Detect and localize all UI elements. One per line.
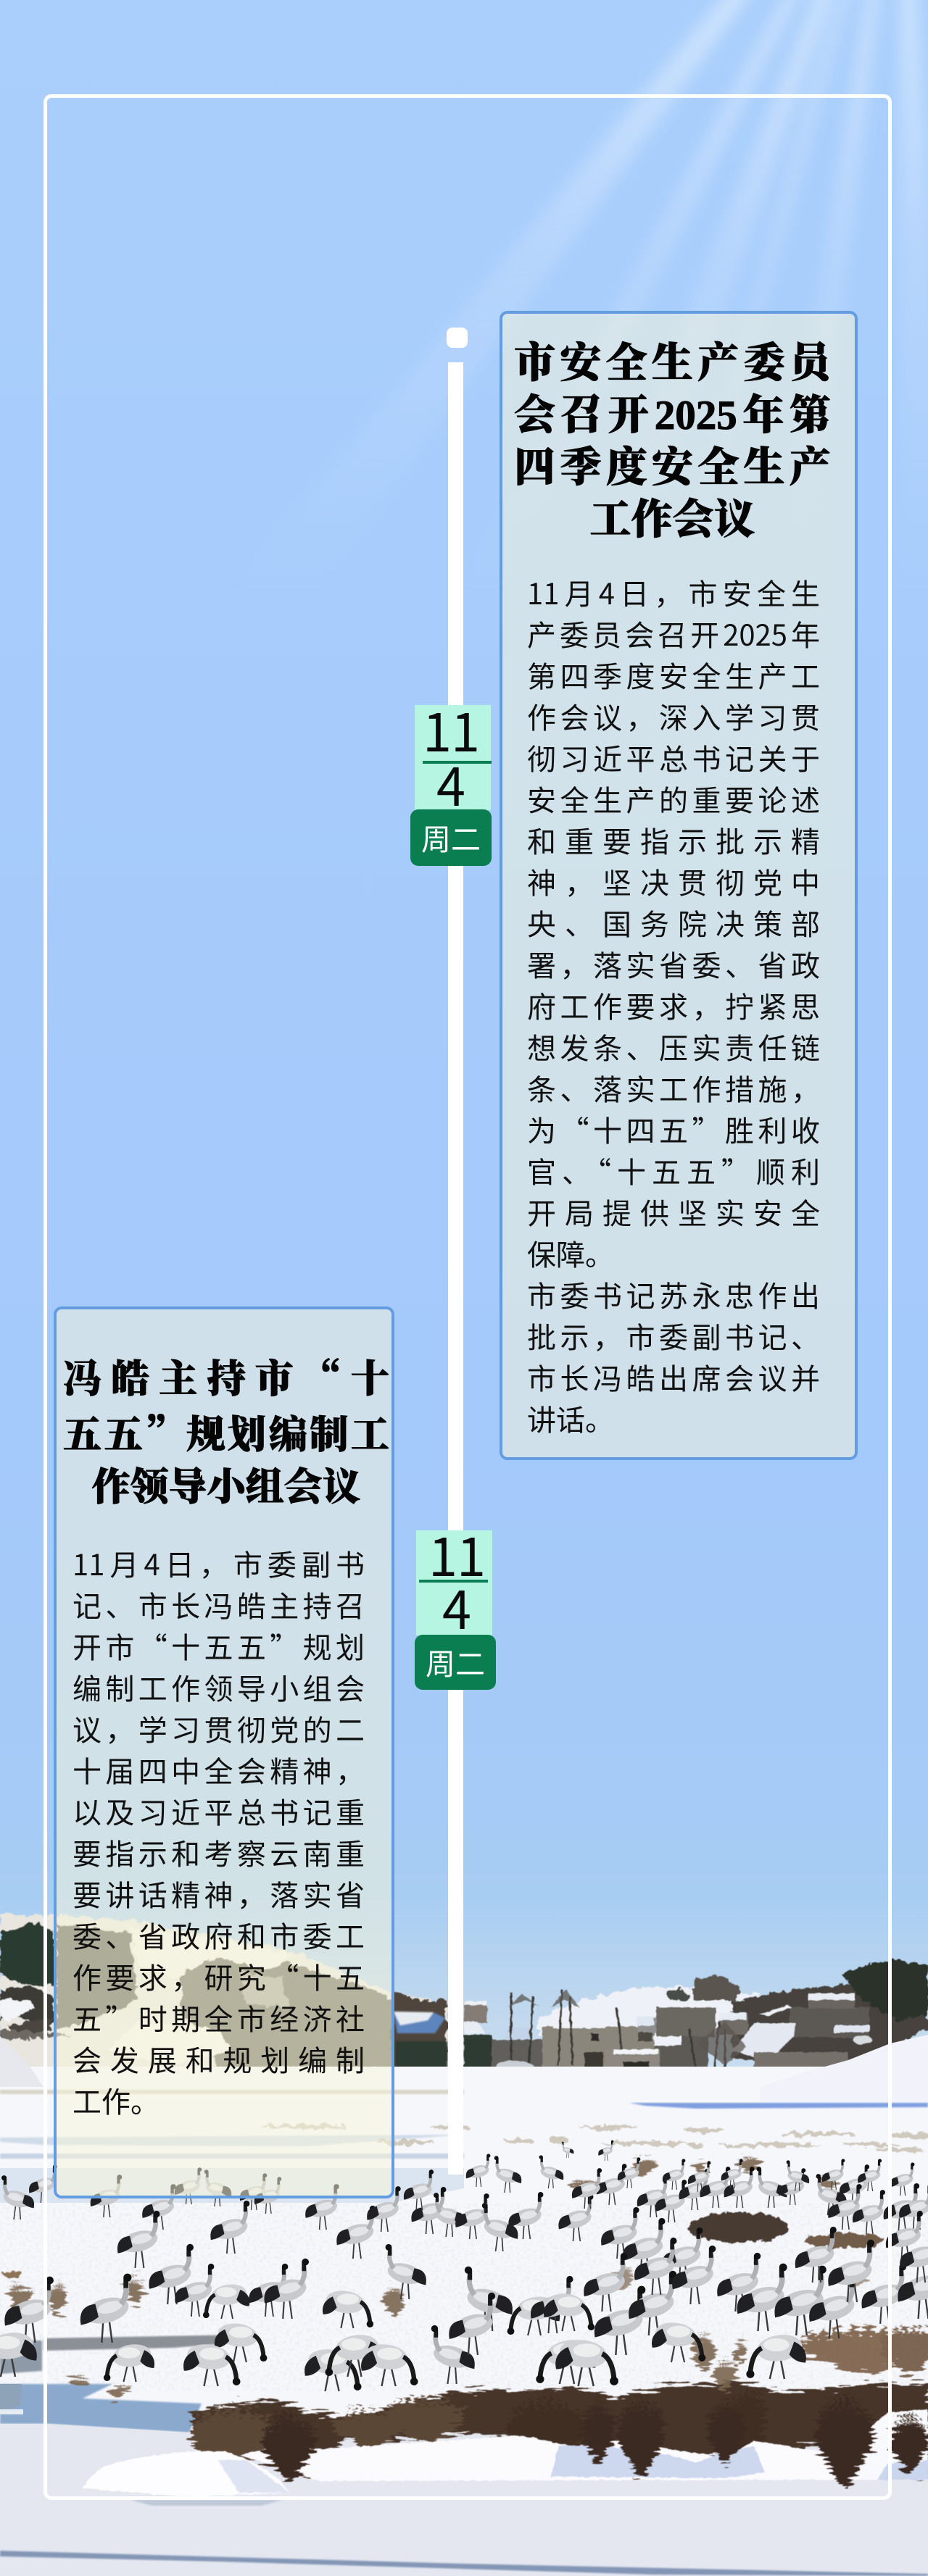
text block: 15th five-year plan meeting: 会发展和规划编制 [72, 2038, 365, 2080]
text block: 15th five-year plan meeting: 工作。 [72, 2079, 160, 2121]
text block: safety production meeting: 讲话。 [527, 1397, 614, 1439]
black-necked cranes [0, 2141, 928, 2391]
panel: 15th five-year plan meeting [54, 1306, 394, 2198]
weekday tag [410, 809, 492, 866]
text block: 15th five-year plan meeting: 五”时期全市经济社 [72, 1996, 365, 2038]
weekday tag [415, 1635, 496, 1690]
text block: safety production meeting: 条、落实工作措施， [527, 1067, 820, 1109]
text block: safety production meeting: 神，坚决贯彻党中 [527, 860, 820, 902]
text block: 15th five-year plan meeting: 开市“十五五”规划 [72, 1625, 365, 1667]
heading: 15th five-year plan meeting [63, 1349, 389, 1509]
text block: safety production meeting: 为“十四五”胜利收 [527, 1108, 820, 1150]
text block: 15th five-year plan meeting: 委、省政府和市委工 [72, 1914, 365, 1956]
text block: 15th five-year plan meeting [72, 1542, 365, 2121]
text block: safety production meeting: 想发条、压实责任链 [527, 1025, 820, 1067]
heading: safety production meeting: 四季度安全生产 [514, 445, 831, 491]
text block: 15th five-year plan meeting: 作要求，研究“十五 [72, 1955, 365, 1997]
panel: safety production meeting [500, 311, 858, 1460]
text block: 15th five-year plan meeting: 记、市长冯皓主持召 [72, 1583, 365, 1625]
date badge: second item [415, 1515, 496, 1690]
timeline: top dot [447, 328, 468, 348]
text block: safety production meeting: 11月4日，市安全生 [527, 571, 820, 613]
weekday tag: 周二 [421, 815, 481, 859]
heading: safety production meeting: 市安全生产委员 [514, 341, 831, 386]
brown dry grass band [190, 2380, 928, 2478]
text block: 15th five-year plan meeting: 以及习近平总书记重 [72, 1790, 365, 1832]
date badge: first item [410, 691, 492, 866]
text block: safety production meeting: 市长冯皓出席会议并 [527, 1356, 820, 1398]
weekday tag: 周二 [426, 1640, 485, 1683]
sun rays [115, 0, 928, 725]
text block: safety production meeting: 和重要指示批示精 [527, 819, 820, 861]
date day: 4 [436, 745, 465, 821]
roof and trees at right of left panel [394, 2012, 447, 2069]
text block: safety production meeting: 批示，市委副书记、 [527, 1314, 820, 1356]
heading: 15th five-year plan meeting: 冯皓主持市“十 [63, 1349, 389, 1404]
text block: safety production meeting: 市委书记苏永忠作出 [527, 1273, 820, 1315]
timeline: vertical line [448, 362, 463, 2175]
date day: 4 [442, 1568, 471, 1644]
distant hill and tree line [538, 1961, 928, 2065]
date month: 11 [423, 691, 479, 767]
small tufts and grass patches [9, 2155, 928, 2397]
text block: 15th five-year plan meeting: 十届四中全会精神， [72, 1748, 365, 1791]
text block: safety production meeting: 开局提供坚实安全 [527, 1191, 820, 1233]
grass bushes in front of the snow [262, 2388, 928, 2485]
text block: 15th five-year plan meeting: 11月4日，市委副书 [72, 1542, 365, 1584]
left snowy hill and pine trees [0, 1915, 450, 2072]
text block: safety production meeting: 安全生产的重要论述 [527, 778, 820, 820]
text block: safety production meeting: 彻习近平总书记关于 [527, 736, 820, 778]
text block: safety production meeting: 产委员会召开2025年 [527, 612, 820, 654]
heading: safety production meeting [514, 341, 831, 543]
text block: safety production meeting: 府工作要求，拧紧思 [527, 984, 820, 1026]
date month: 11 [428, 1515, 485, 1591]
text block: 15th five-year plan meeting: 要讲话精神，落实省 [72, 1872, 365, 1914]
village houses [464, 1989, 873, 2072]
text block: 15th five-year plan meeting: 要指示和考察云南重 [72, 1831, 365, 1873]
text block: safety production meeting [527, 571, 820, 1439]
text block: safety production meeting: 官、“十五五”顺利 [527, 1149, 820, 1191]
snow texture [0, 2203, 928, 2391]
text block: safety production meeting: 保障。 [527, 1232, 614, 1274]
earth mounds [1, 2212, 884, 2278]
water and ice [0, 2335, 928, 2576]
heading: 15th five-year plan meeting: 五五”规划编制工 [63, 1404, 389, 1459]
text block: safety production meeting: 央、国务院决策部 [527, 901, 820, 943]
heading: safety production meeting: 会召开2025年第 [514, 393, 831, 438]
text block: safety production meeting: 作会议，深入学习贯 [527, 695, 820, 737]
heading: safety production meeting: 工作会议 [590, 497, 755, 543]
text block: 15th five-year plan meeting: 编制工作领导小组会 [72, 1666, 365, 1708]
snow mounds in the foreground [83, 2409, 928, 2497]
dry grass streaks in the field [261, 2125, 928, 2152]
text block: safety production meeting: 署，落实省委、省政 [527, 943, 820, 985]
text block: safety production meeting: 第四季度安全生产工 [527, 654, 820, 696]
snow field [0, 2035, 928, 2443]
text block: 15th five-year plan meeting: 议，学习贯彻党的二 [72, 1707, 365, 1749]
heading: 15th five-year plan meeting: 作领导小组会议 [91, 1467, 361, 1509]
